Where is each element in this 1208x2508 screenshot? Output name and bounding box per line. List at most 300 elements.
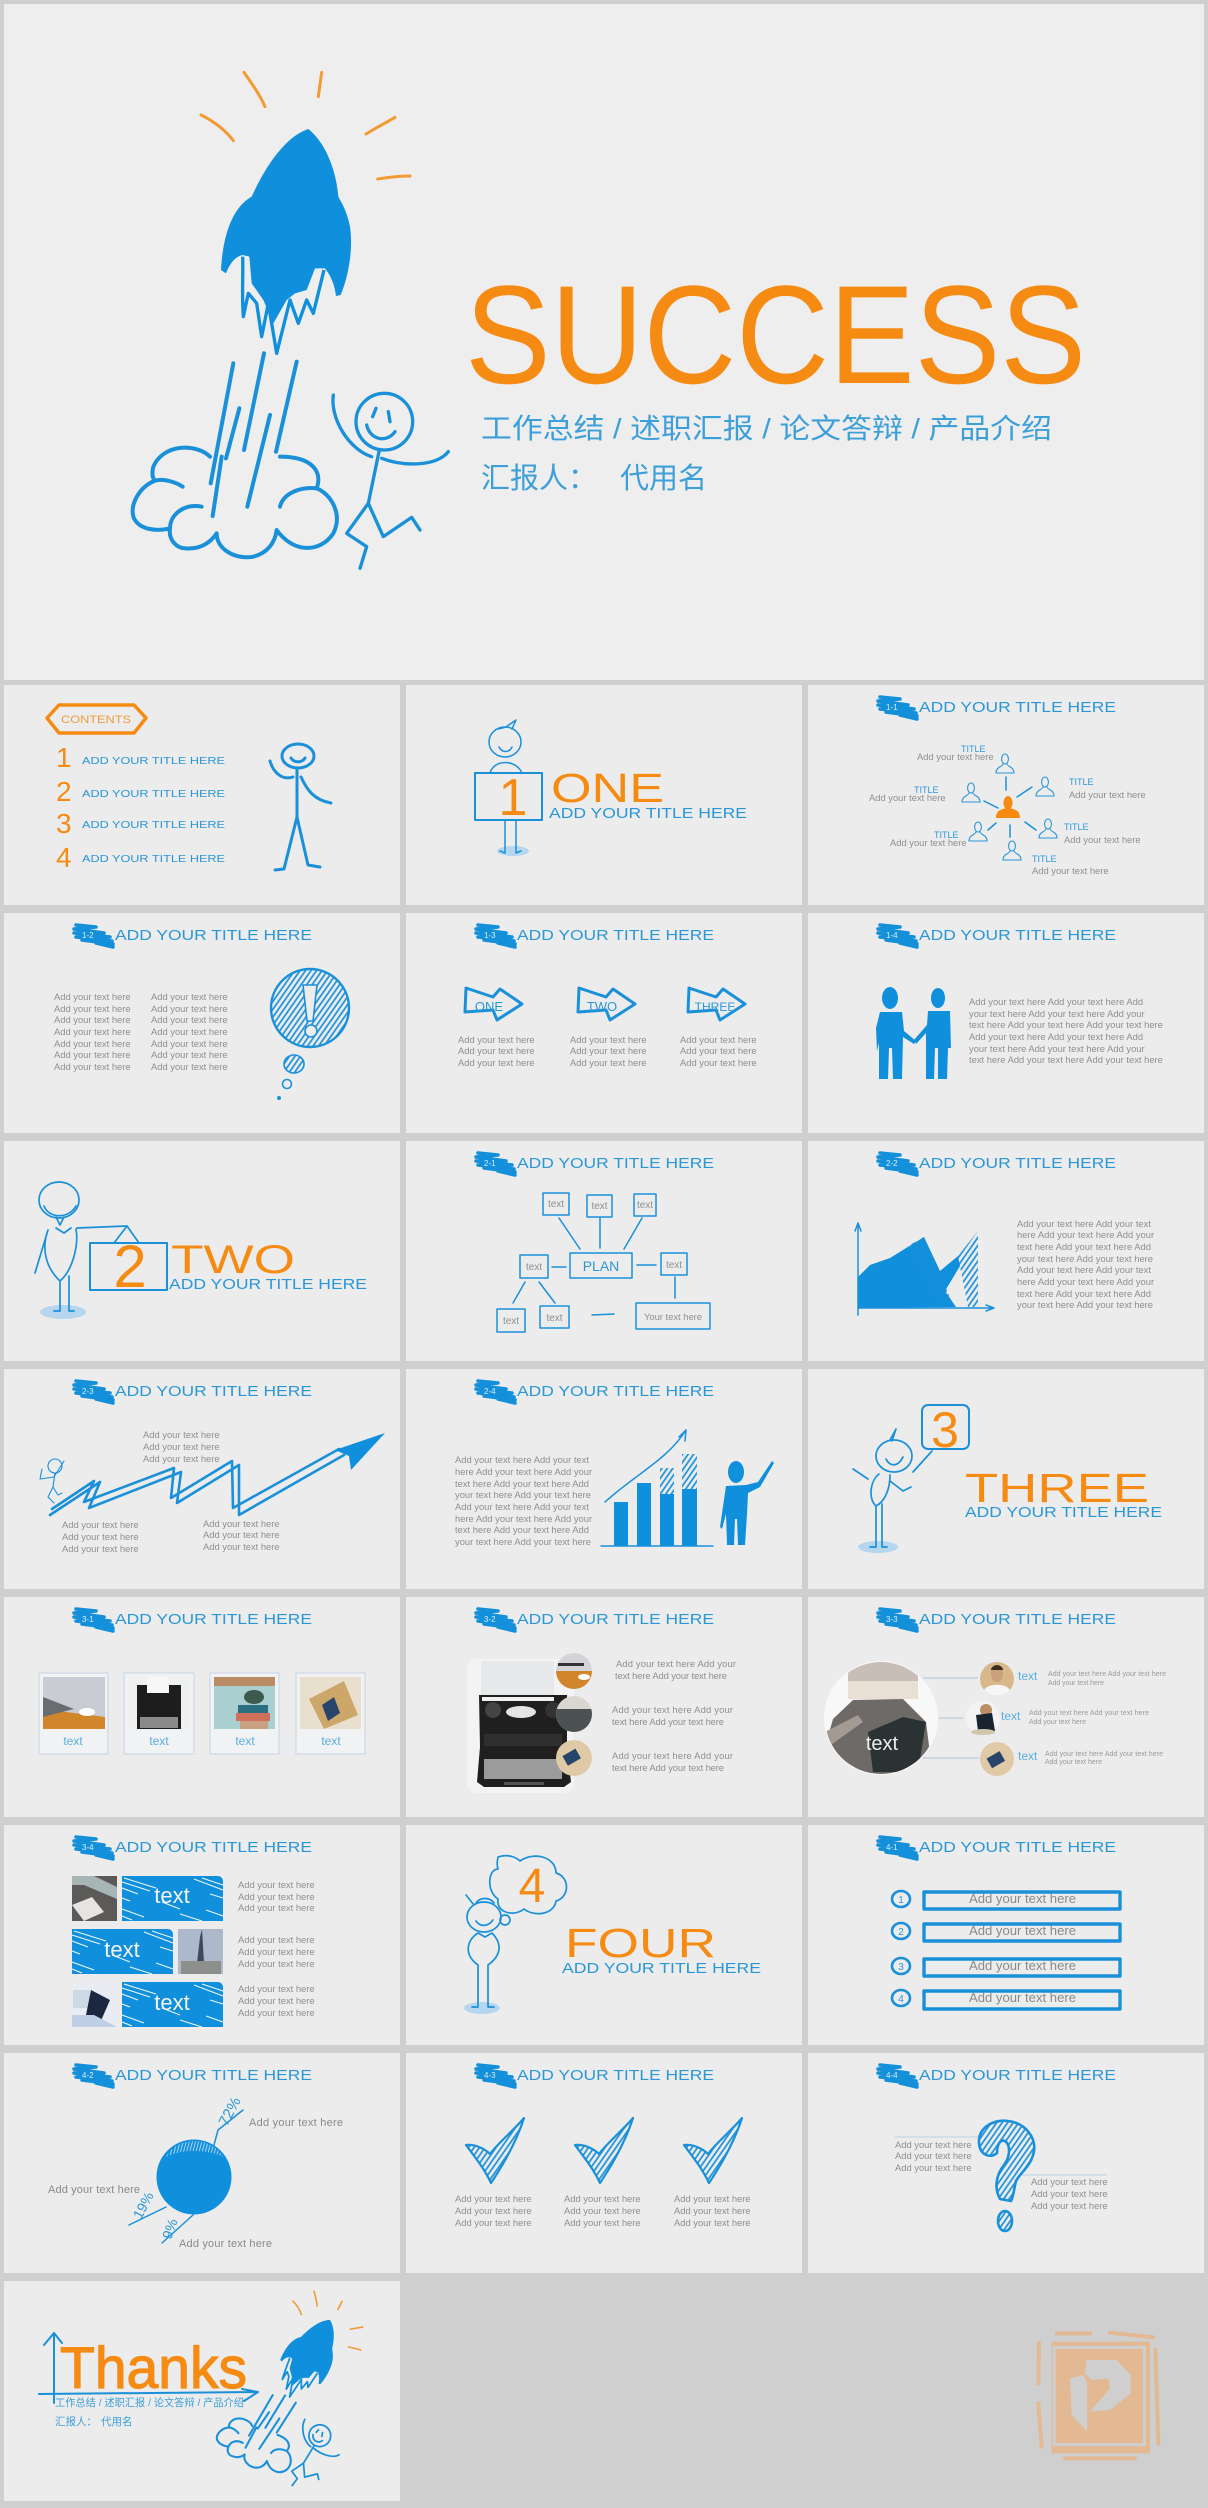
box text top right: text xyxy=(637,1200,653,1211)
header: 1-2 xyxy=(82,931,94,940)
text block lower right: Add your text here xyxy=(203,1541,280,1552)
presenter line: 代用名 xyxy=(620,462,707,495)
box text lower left xyxy=(497,1309,525,1332)
row 2 blue card: text xyxy=(104,1937,140,1962)
text blocks: Add your text here Add your xyxy=(612,1704,733,1715)
row 3 blue card: text xyxy=(154,1990,190,2015)
label 9%: Add your text here xyxy=(179,2238,272,2250)
text column left: Add your text here xyxy=(54,1014,131,1025)
header: ADD YOUR TITLE HERE xyxy=(115,927,312,944)
text blocks: Add your text here xyxy=(238,1958,315,1969)
icon: presenter silhouette xyxy=(720,1461,774,1545)
header: ADD YOUR TITLE HERE xyxy=(115,1839,312,1856)
labels: Add your text here xyxy=(1069,789,1146,800)
small text blocks: Add your text here Add your text here xyxy=(1048,1671,1166,1678)
contents list: 2 xyxy=(56,776,72,807)
number 2: 2 xyxy=(113,1233,147,1300)
heading Thanks: Thanks xyxy=(60,2336,247,2401)
label 9%: 9% xyxy=(159,2217,181,2241)
header xyxy=(74,1609,312,1631)
text column right: Add your text here xyxy=(151,1049,228,1060)
check icon 1 xyxy=(466,2118,524,2183)
bar chart xyxy=(601,1430,713,1546)
box PLAN xyxy=(570,1253,632,1278)
zigzag arrow xyxy=(50,1433,385,1515)
presenter line: 代用名 xyxy=(101,2415,132,2428)
row 3 blue card xyxy=(122,1982,223,2027)
presenter line: 汇报人： xyxy=(55,2415,97,2428)
item 2 xyxy=(892,1923,1120,1941)
text block lower right: Add your text here xyxy=(203,1518,280,1529)
text blocks: Add your text here xyxy=(570,1045,647,1056)
header: 4-3 xyxy=(484,2071,496,2080)
label 19% xyxy=(48,2184,157,2221)
panel: slide 2-4 bar chart xyxy=(406,1369,802,1589)
label 9% xyxy=(159,2217,272,2250)
number 1: 1 xyxy=(499,769,527,827)
icon: stick figure holding sign xyxy=(475,720,542,853)
text block right: Add your text here xyxy=(1031,2188,1108,2199)
arrow axes xyxy=(39,2333,258,2403)
header: ADD YOUR TITLE HERE xyxy=(115,1383,312,1400)
icon: stick figure thumbs up xyxy=(270,744,331,870)
arrow THREE xyxy=(688,988,745,1020)
person node lower left xyxy=(969,822,987,841)
paragraph: here Add your text here Add your xyxy=(455,1466,592,1477)
contents list: ADD YOUR TITLE HERE xyxy=(82,819,225,831)
box text top center xyxy=(587,1195,612,1217)
check icon 3 xyxy=(684,2118,742,2183)
text blocks: Add your text here xyxy=(674,2217,751,2228)
header xyxy=(476,2065,714,2087)
label 72%: 72% xyxy=(216,2094,245,2129)
header: 4-2 xyxy=(82,2071,94,2080)
panel: slide 3-1 photo cards xyxy=(4,1597,400,1817)
row 1 photo xyxy=(72,1876,117,1921)
text block top: Add your text here xyxy=(143,1429,220,1440)
icon: question mark xyxy=(979,2121,1034,2231)
area chart xyxy=(855,1223,994,1315)
text blocks xyxy=(238,1879,315,2018)
box text right: text xyxy=(666,1260,682,1271)
subheading: ADD YOUR TITLE HERE xyxy=(549,805,747,822)
labels: TITLE xyxy=(1032,854,1057,864)
connectors xyxy=(513,1218,675,1315)
box text left: text xyxy=(526,1262,542,1273)
row 1 blue card: text xyxy=(154,1883,190,1908)
labels xyxy=(869,744,1146,876)
card: tablet photo: text xyxy=(321,1734,341,1748)
card: desk photo xyxy=(39,1673,108,1754)
row 2 photo xyxy=(178,1929,223,1974)
paragraph: here Add your text here Add your xyxy=(1017,1229,1154,1240)
illustration: tilted rocket xyxy=(210,2277,388,2497)
header: 1-3 xyxy=(484,931,496,940)
subtitle: 工作总结 / 述职汇报 / 论文答辩 / 产品介绍 xyxy=(55,2396,244,2409)
icon: running figure xyxy=(40,1459,64,1503)
box text right xyxy=(661,1253,687,1275)
divider lines xyxy=(895,2137,1107,2175)
person node right xyxy=(1036,777,1054,796)
text blocks: Add your text here Add your xyxy=(612,1750,733,1761)
row 2 blue card xyxy=(72,1929,173,1974)
header xyxy=(878,697,1116,719)
labels: Add your text here xyxy=(1032,865,1109,876)
leader lines xyxy=(129,2110,243,2243)
header xyxy=(878,2065,1116,2087)
heading ONE: ONE xyxy=(551,765,664,811)
text blocks xyxy=(458,1034,757,1068)
text blocks: text here Add your text here xyxy=(615,1670,727,1681)
heading THREE: THREE xyxy=(965,1465,1149,1511)
small text blocks xyxy=(1029,1671,1166,1766)
panel: slide 2-3 rising arrow xyxy=(4,1369,400,1589)
text block left xyxy=(895,2139,972,2173)
icon: two people shaking hands xyxy=(876,987,951,1079)
header: ADD YOUR TITLE HERE xyxy=(517,1383,714,1400)
subheading: ADD YOUR TITLE HERE xyxy=(562,1960,761,1977)
text blocks: Add your text here xyxy=(238,1946,315,1957)
text blocks: Add your text here xyxy=(458,1057,535,1068)
item 3: Add your text here xyxy=(969,1958,1076,1973)
captions: text xyxy=(1001,1709,1021,1723)
box your text here xyxy=(636,1303,710,1329)
header: ADD YOUR TITLE HERE xyxy=(919,2067,1116,2084)
panel: contents slide xyxy=(4,685,400,905)
heading FOUR: FOUR xyxy=(565,1920,716,1966)
panel: slide 3-3 circle photos xyxy=(808,1597,1204,1817)
item 2: 2 xyxy=(898,1927,904,1938)
text block left: Add your text here xyxy=(895,2139,972,2150)
check icon 2 xyxy=(575,2118,633,2183)
text column left: Add your text here xyxy=(54,1061,131,1072)
small photo: person at desk xyxy=(966,1701,1000,1735)
row 3 photo xyxy=(72,1982,117,2027)
text blocks: Add your text here xyxy=(238,1891,315,1902)
header: ADD YOUR TITLE HERE xyxy=(517,927,714,944)
text block right: Add your text here xyxy=(1031,2200,1108,2211)
box text lower left: text xyxy=(503,1316,519,1327)
item 2: Add your text here xyxy=(969,1923,1076,1938)
text blocks: Add your text here xyxy=(674,2193,751,2204)
paragraph: text here Add your text here Add your text here xyxy=(969,1019,1163,1030)
text block top: Add your text here xyxy=(143,1453,220,1464)
text column right xyxy=(151,991,228,1072)
text blocks: Add your text here xyxy=(680,1057,757,1068)
text column right: Add your text here xyxy=(151,1061,228,1072)
text column left: Add your text here xyxy=(54,1038,131,1049)
item 1 xyxy=(892,1891,1120,1909)
header: 2-3 xyxy=(82,1387,94,1396)
item 3 xyxy=(892,1958,1120,1976)
labels: TITLE xyxy=(961,744,986,754)
text blocks: text here Add your text here xyxy=(612,1762,724,1773)
contents list: ADD YOUR TITLE HERE xyxy=(82,853,225,865)
text blocks: Add your text here xyxy=(680,1045,757,1056)
connector lines xyxy=(923,1678,979,1758)
text column left: Add your text here xyxy=(54,991,131,1002)
paragraph: text here Add your text here Add your text here xyxy=(969,1054,1163,1065)
text blocks: Add your text here xyxy=(680,1034,757,1045)
center person icon xyxy=(996,796,1020,818)
panel: slide 1-1 people network xyxy=(808,685,1204,905)
box PLAN: PLAN xyxy=(583,1258,619,1274)
small text blocks: Add your text here xyxy=(1048,1680,1104,1687)
header: 2-4 xyxy=(484,1387,496,1396)
text block lower left: Add your text here xyxy=(62,1519,139,1530)
text blocks: Add your text here xyxy=(455,2193,532,2204)
paragraph: your text here Add your text here Add your xyxy=(969,1008,1145,1019)
panel: section two xyxy=(4,1141,400,1361)
panel: thanks slide xyxy=(4,2277,400,2501)
text column right: Add your text here xyxy=(151,1038,228,1049)
small text blocks: Add your text here xyxy=(1029,1719,1086,1726)
header: 2-2 xyxy=(886,1159,898,1168)
text blocks: Add your text here xyxy=(238,2007,315,2018)
header: 4-1 xyxy=(886,1843,898,1852)
text block top: Add your text here xyxy=(143,1441,220,1452)
header: ADD YOUR TITLE HERE xyxy=(919,927,1116,944)
box text lower middle xyxy=(540,1306,569,1328)
subheading: ADD YOUR TITLE HERE xyxy=(169,1276,367,1293)
text column left: Add your text here xyxy=(54,1049,131,1060)
item 4: 4 xyxy=(898,1994,904,2005)
text block left: Add your text here xyxy=(895,2150,972,2161)
text block lower left: Add your text here xyxy=(62,1531,139,1542)
panel: slide 4-4 question mark xyxy=(808,2053,1204,2273)
labels: Add your text here xyxy=(917,751,994,762)
labels: TITLE xyxy=(1064,822,1089,832)
header: 3-3 xyxy=(886,1615,898,1624)
paragraph: here Add your text here Add your xyxy=(455,1513,592,1524)
contents list xyxy=(56,742,225,873)
text blocks: Add your text here xyxy=(564,2193,641,2204)
person node lower right xyxy=(1039,819,1057,838)
header xyxy=(74,2065,312,2087)
contents list: 4 xyxy=(56,842,72,873)
labels: Add your text here xyxy=(869,792,946,803)
text block right xyxy=(1031,2176,1108,2211)
shadow xyxy=(464,2002,500,2014)
paragraph: Add your text here Add your text here Add xyxy=(969,1031,1143,1042)
text blocks: Add your text here xyxy=(455,2217,532,2228)
header: ADD YOUR TITLE HERE xyxy=(517,1611,714,1628)
header: ADD YOUR TITLE HERE xyxy=(919,699,1116,716)
paragraph: your text here Add your text here Add your xyxy=(969,1043,1145,1054)
arrow THREE: THREE xyxy=(695,1000,735,1014)
header xyxy=(878,925,1116,947)
panel: section one xyxy=(406,685,802,905)
header: ADD YOUR TITLE HERE xyxy=(517,1155,714,1172)
person node left xyxy=(962,783,980,802)
header xyxy=(878,1837,1116,1859)
text block lower right xyxy=(203,1518,280,1552)
paragraph xyxy=(1017,1218,1154,1310)
paragraph: Add your text here Add your text xyxy=(455,1454,589,1465)
icon: stick figure with thought cloud xyxy=(466,1856,566,2007)
panel: slide 3-4 blue cards xyxy=(4,1825,400,2045)
paragraph: Add your text here Add your text xyxy=(1017,1218,1151,1229)
paragraph: Add your text here Add your text here Add xyxy=(969,996,1143,1007)
person node top xyxy=(996,754,1014,773)
paragraph: here Add your text here Add your xyxy=(1017,1276,1154,1287)
paragraph: your text here Add your text here xyxy=(455,1489,591,1500)
subtitle: 工作总结 / 述职汇报 / 论文答辩 / 产品介绍 xyxy=(481,413,1052,444)
text blocks: Add your text here xyxy=(564,2217,641,2228)
panel: slide 3-2 typewriter xyxy=(406,1597,802,1817)
icon: stick figure with hanging sign xyxy=(35,1182,167,1311)
box text left xyxy=(520,1255,548,1278)
text column left: Add your text here xyxy=(54,1026,131,1037)
photo circle: city xyxy=(556,1696,592,1732)
text column right: Add your text here xyxy=(151,1014,228,1025)
label 72%: Add your text here xyxy=(249,2117,343,2129)
card: typewriter photo xyxy=(124,1673,194,1754)
label 19%: Add your text here xyxy=(48,2184,140,2196)
header: 3-4 xyxy=(82,1843,94,1852)
item 3: 3 xyxy=(898,1962,904,1973)
header xyxy=(476,1609,714,1631)
header xyxy=(74,1381,312,1403)
panel: slide 2-1 plan diagram xyxy=(406,1141,802,1361)
paragraph: text here Add your text here Add xyxy=(455,1524,589,1535)
header xyxy=(476,1153,714,1175)
contents list: ADD YOUR TITLE HERE xyxy=(82,788,225,800)
small text blocks: Add your text here Add your text here xyxy=(1029,1710,1149,1717)
card: tablet photo xyxy=(296,1673,365,1754)
arrow TWO: TWO xyxy=(587,999,617,1014)
header xyxy=(878,1153,1116,1175)
header: 1-4 xyxy=(886,931,898,940)
logo stamp xyxy=(1038,2333,1158,2458)
paragraph: text here Add your text here Add xyxy=(1017,1241,1151,1252)
card: desk photo: text xyxy=(63,1734,83,1748)
paragraph: your text here Add your text here xyxy=(455,1536,591,1547)
header: ADD YOUR TITLE HERE xyxy=(115,2067,312,2084)
header: 1-1 xyxy=(886,703,898,712)
header: ADD YOUR TITLE HERE xyxy=(115,1611,312,1628)
panel: slide 4-3 check marks xyxy=(406,2053,802,2273)
text blocks: Add your text here xyxy=(570,1057,647,1068)
box text top center: text xyxy=(591,1201,608,1212)
header: 3-2 xyxy=(484,1615,496,1624)
paragraph: your text here Add your text here xyxy=(1017,1253,1153,1264)
photo: typewriter xyxy=(467,1659,574,1793)
panel: section three xyxy=(808,1369,1204,1589)
sphere xyxy=(156,2140,232,2214)
text blocks: Add your text here xyxy=(238,1879,315,1890)
panel: slide 4-2 sphere percentages xyxy=(4,2053,400,2273)
labels: TITLE xyxy=(914,785,939,795)
text blocks: Add your text here xyxy=(458,1045,535,1056)
captions: text xyxy=(1018,1669,1038,1683)
label 19%: 19% xyxy=(130,2189,157,2221)
main circle photo with caption: text xyxy=(866,1733,899,1755)
text column right: Add your text here xyxy=(151,1026,228,1037)
item 4: Add your text here xyxy=(969,1990,1076,2005)
header xyxy=(74,1837,312,1859)
number 4: 4 xyxy=(519,1860,545,1913)
contents badge xyxy=(47,705,146,733)
text column left: Add your text here xyxy=(54,1003,131,1014)
contents list: 1 xyxy=(56,742,72,773)
text column left xyxy=(54,991,131,1072)
header: 2-1 xyxy=(484,1159,496,1168)
small text blocks: Add your text here xyxy=(1045,1759,1102,1766)
header: 3-1 xyxy=(82,1615,94,1624)
text block left: Add your text here xyxy=(895,2162,972,2173)
title: SUCCESS: SUCCESS xyxy=(465,256,1086,413)
item 4 xyxy=(892,1990,1120,2009)
text block lower right: Add your text here xyxy=(203,1529,280,1540)
box text top left xyxy=(543,1193,569,1215)
captions xyxy=(1001,1669,1038,1763)
small photo: tablet xyxy=(980,1742,1014,1776)
text blocks: Add your text here xyxy=(238,1934,315,1945)
contents list: ADD YOUR TITLE HERE xyxy=(82,755,225,767)
text blocks: Add your text here xyxy=(458,1034,535,1045)
panel: slide 1-3 arrows xyxy=(406,913,802,1133)
header xyxy=(476,1381,714,1403)
paragraph xyxy=(969,996,1163,1065)
header xyxy=(878,1609,1116,1631)
panel: section four xyxy=(406,1825,802,2045)
text blocks: Add your text here xyxy=(238,1902,315,1913)
label 72% xyxy=(216,2094,343,2129)
card: books photo xyxy=(210,1673,279,1754)
header: ADD YOUR TITLE HERE xyxy=(919,1155,1116,1172)
text column right: Add your text here xyxy=(151,991,228,1002)
text column right: Add your text here xyxy=(151,1003,228,1014)
header xyxy=(476,925,714,947)
paragraph xyxy=(455,1454,592,1547)
card: typewriter photo: text xyxy=(149,1734,169,1748)
panel: slide 1-2 exclamation xyxy=(4,913,400,1133)
item 1: 1 xyxy=(898,1895,904,1906)
text blocks: Add your text here xyxy=(238,1995,315,2006)
captions: text xyxy=(1018,1749,1038,1763)
text block lower left: Add your text here xyxy=(62,1543,139,1554)
header: 4-4 xyxy=(886,2071,898,2080)
text blocks: Add your text here xyxy=(455,2205,532,2216)
heading TWO: TWO xyxy=(171,1238,295,1282)
labels: TITLE xyxy=(934,830,959,840)
shadow xyxy=(497,846,529,856)
connectors xyxy=(984,777,1036,837)
paragraph: Add your text here Add your text xyxy=(1017,1264,1151,1275)
text blocks: Add your text here xyxy=(570,1034,647,1045)
box text top left: text xyxy=(548,1199,564,1210)
panel: slide 2-2 mountain chart xyxy=(808,1141,1204,1361)
contents list: 3 xyxy=(56,808,72,839)
panel: slide 1-4 handshake xyxy=(808,913,1204,1133)
presenter line: 汇报人： xyxy=(481,462,597,495)
small text blocks: Add your text here Add your text here xyxy=(1045,1751,1163,1758)
text blocks: Add your text here Add your xyxy=(616,1658,736,1669)
number 3: 3 xyxy=(931,1402,959,1458)
text block top xyxy=(143,1429,220,1464)
main circle photo with caption xyxy=(824,1661,938,1777)
header: ADD YOUR TITLE HERE xyxy=(517,2067,714,2084)
paragraph: text here Add your text here Add xyxy=(1017,1288,1151,1299)
header xyxy=(74,925,312,947)
box text top right xyxy=(634,1194,656,1216)
card: books photo: text xyxy=(235,1734,255,1748)
contents badge: CONTENTS xyxy=(61,714,131,726)
arrow ONE xyxy=(465,988,522,1020)
paragraph: your text here Add your text here xyxy=(1017,1299,1153,1310)
person node bottom xyxy=(1003,841,1021,860)
